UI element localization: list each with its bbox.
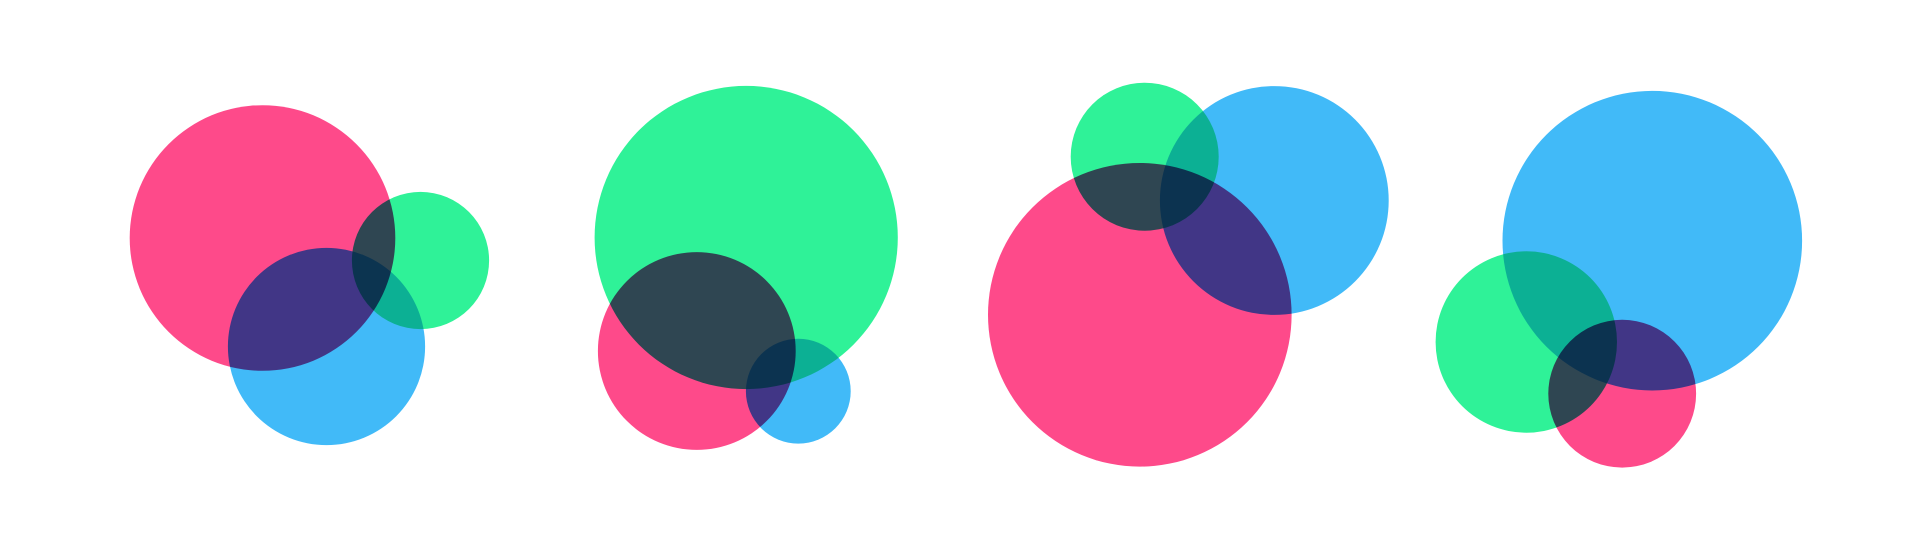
blue circle [1160, 86, 1389, 315]
pink circle [598, 252, 796, 450]
group 1: large pink, blue and green circles [130, 105, 489, 445]
group 3: large pink, blue and green circles [988, 83, 1389, 467]
blue circle [746, 339, 851, 444]
pink circle [1548, 320, 1696, 468]
green circle [1071, 83, 1219, 231]
green circle [595, 86, 898, 389]
green circle [1436, 251, 1617, 433]
group 4: large blue, green and pink circles [1436, 91, 1802, 468]
pink circle [988, 163, 1292, 467]
blue circle [1502, 91, 1802, 390]
blue circle [228, 248, 425, 445]
pink circle [130, 105, 395, 371]
group 2: large green, pink and blue circles [595, 86, 898, 450]
green circle [352, 192, 489, 329]
